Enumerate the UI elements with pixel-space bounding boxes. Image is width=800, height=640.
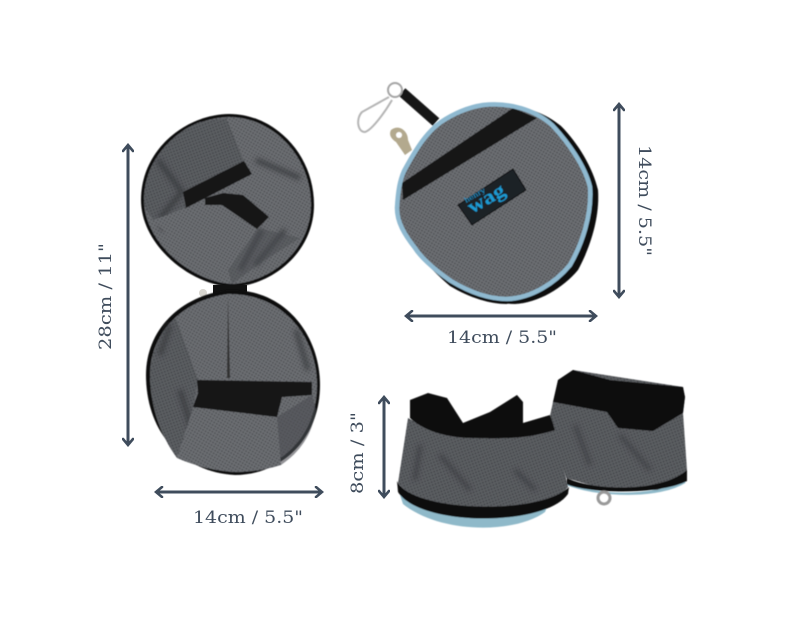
folding bowl: right (behind) <box>548 370 687 504</box>
dimension arrow: bowl height <box>382 397 386 497</box>
dimension label: open pouch width: 14cm / 5.5" <box>193 508 303 527</box>
dimension label: closed pouch height: 14cm / 5.5" <box>635 145 654 256</box>
logo patch: wag <box>464 179 509 218</box>
dimension arrow: open pouch height <box>126 145 130 445</box>
open pouch: zip connector <box>199 285 247 300</box>
dimension label: open pouch height: 28cm / 11" <box>96 243 115 350</box>
dimension arrow: closed pouch height <box>618 104 620 297</box>
logo patch <box>458 169 526 225</box>
open pouch: lower half <box>146 290 320 475</box>
dimension label: bowl height: 8cm / 3" <box>348 412 367 494</box>
pouch zip strip <box>402 108 537 200</box>
dimension label: closed pouch width: 14cm / 5.5" <box>447 328 557 347</box>
open pouch: upper half <box>141 114 314 287</box>
logo patch: henry <box>463 186 487 205</box>
folding bowl: left (front) <box>397 393 569 528</box>
closed pouch with logo <box>358 83 598 304</box>
dimension arrow: open pouch width <box>156 490 322 494</box>
dimension arrow: closed pouch width <box>406 314 596 318</box>
strap and clip <box>358 83 436 155</box>
metal clip <box>598 492 610 504</box>
